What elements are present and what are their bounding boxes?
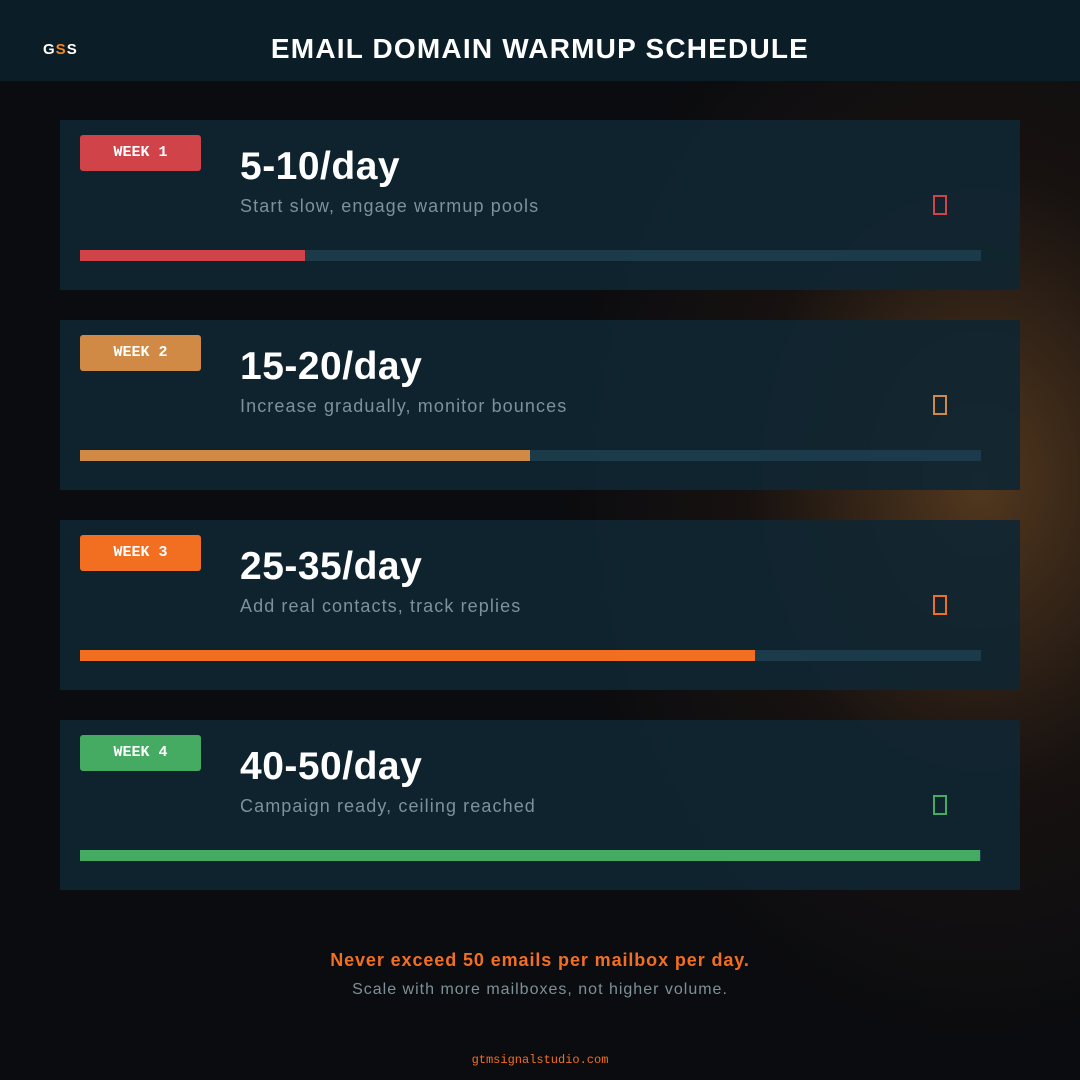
panel: week 2 bbox=[60, 320, 1020, 490]
badge: week 1 bbox=[80, 135, 201, 171]
badge: week 2: WEEK 2 bbox=[113, 344, 168, 361]
progress bar: week 3 bbox=[80, 650, 981, 661]
icon: week 4 bbox=[933, 795, 947, 815]
description: week 2: Increase gradually, monitor bounces bbox=[240, 396, 567, 416]
description: week 3: Add real contacts, track replies bbox=[240, 596, 521, 616]
title: EMAIL DOMAIN WARMUP SCHEDULE bbox=[271, 33, 809, 64]
warning callout: Never exceed 50 emails per mailbox per day. bbox=[330, 950, 750, 970]
rate: week 4: 40-50/day bbox=[240, 745, 422, 788]
rate: week 3: 25-35/day bbox=[240, 545, 422, 588]
badge: week 4 bbox=[80, 735, 201, 771]
rate: week 1: 5-10/day bbox=[240, 145, 400, 188]
icon: week 1 bbox=[933, 195, 947, 215]
rate: week 2: 15-20/day bbox=[240, 345, 422, 388]
progress bar: week 2 bbox=[80, 450, 981, 461]
progress bar: week 1 bbox=[80, 250, 981, 261]
panel: week 4 bbox=[60, 720, 1020, 890]
badge: week 1: WEEK 1 bbox=[113, 144, 168, 161]
description: week 1: Start slow, engage warmup pools bbox=[240, 196, 539, 216]
logo: GSS bbox=[43, 41, 78, 58]
description: week 4: Campaign ready, ceiling reached bbox=[240, 796, 536, 816]
panel: week 3 bbox=[60, 520, 1020, 690]
panel: week 1 bbox=[60, 120, 1020, 290]
icon: week 2 bbox=[933, 395, 947, 415]
note text: Scale with more mailboxes, not higher volume. bbox=[352, 981, 728, 998]
badge: week 2 bbox=[80, 335, 201, 371]
badge: week 3: WEEK 3 bbox=[113, 544, 168, 561]
progress bar: week 4 bbox=[80, 850, 981, 861]
footer url: gtmsignalstudio.com bbox=[472, 1053, 608, 1067]
badge: week 3 bbox=[80, 535, 201, 571]
header bar bbox=[0, 0, 1080, 81]
badge: week 4: WEEK 4 bbox=[113, 744, 168, 761]
icon: week 3 bbox=[933, 595, 947, 615]
